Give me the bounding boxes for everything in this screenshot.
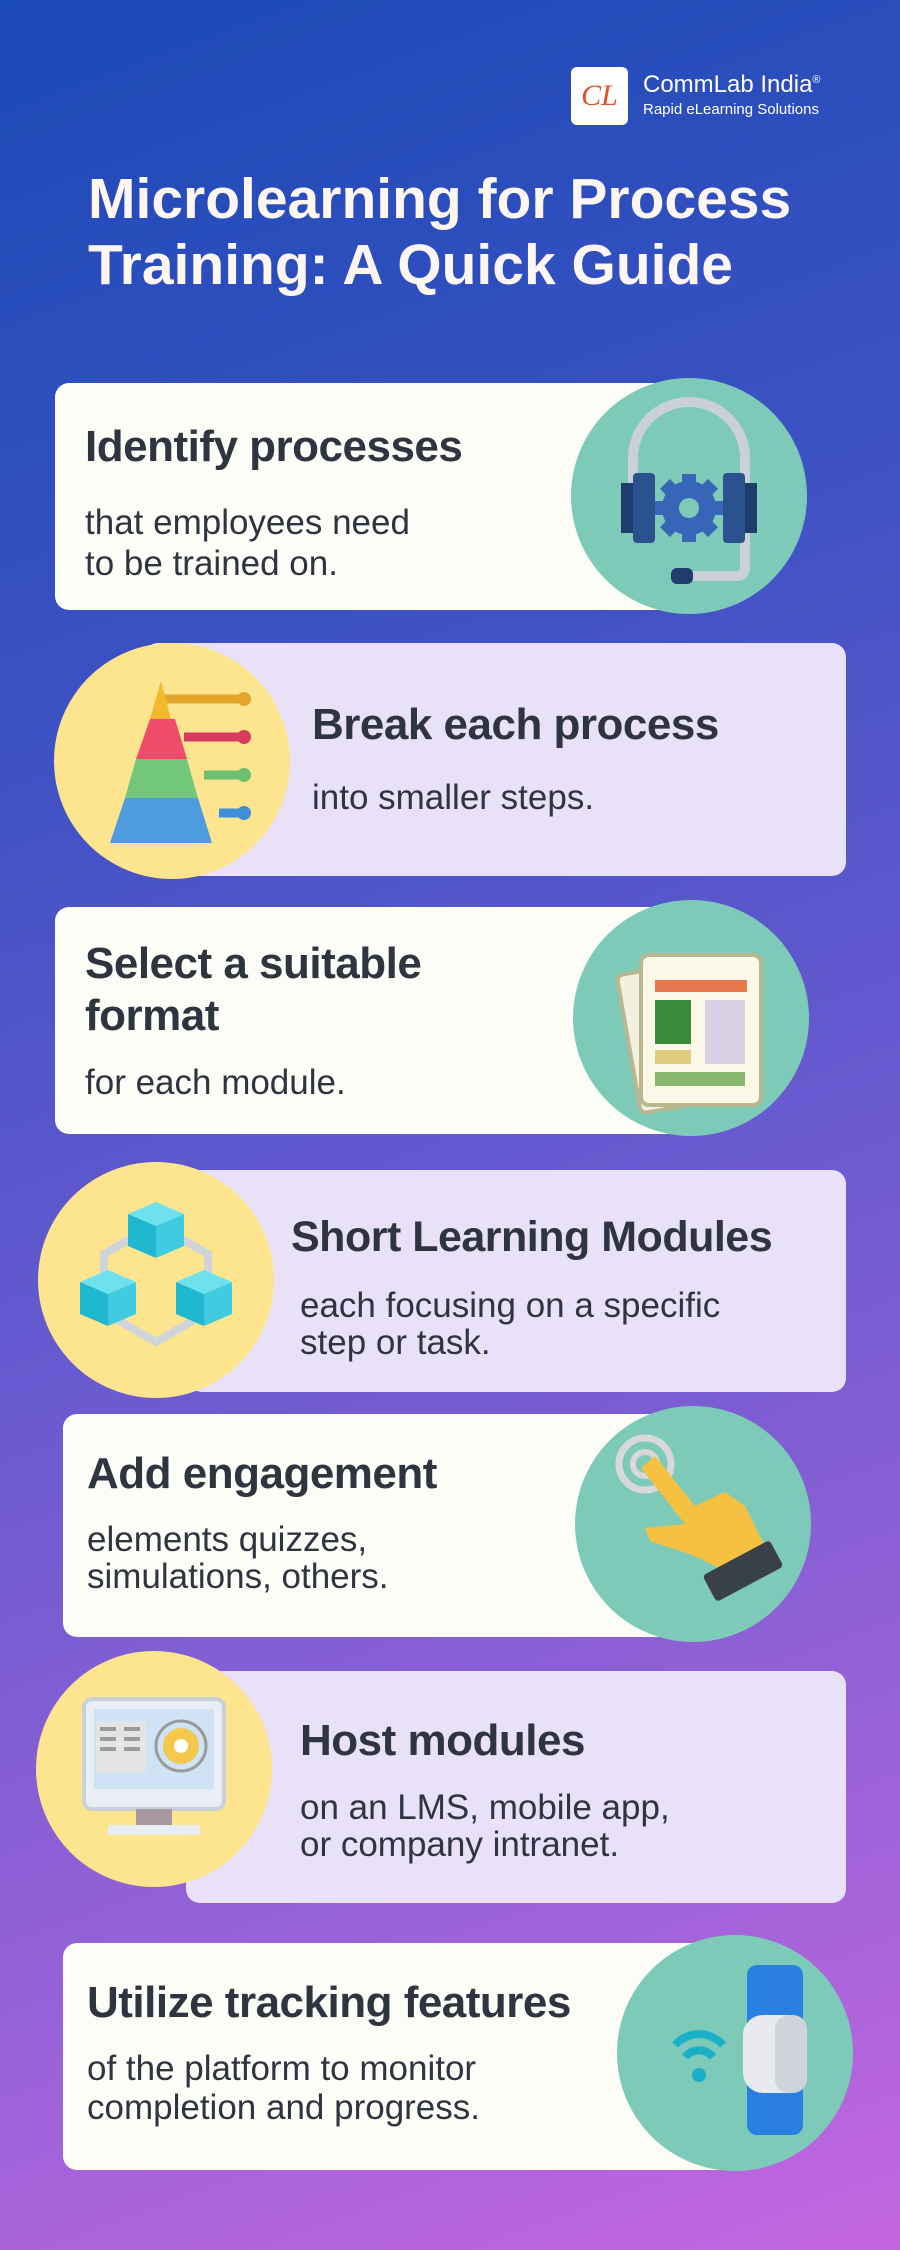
heading [85, 939, 421, 1040]
logo text: CommLab India® [643, 71, 821, 98]
heading: Host modules [300, 1716, 585, 1765]
panel: step 3 [55, 900, 809, 1136]
panel: step 4 [38, 1162, 846, 1398]
title [88, 167, 791, 297]
text: for each module. [85, 1063, 346, 1102]
text: or company intranet. [300, 1825, 619, 1864]
panel: step 2 [54, 643, 846, 879]
text: of the platform to monitor [87, 2049, 476, 2088]
text: completion and progress. [87, 2088, 480, 2127]
panel: step 7 [63, 1935, 853, 2171]
heading: Utilize tracking features [87, 1978, 571, 2027]
icon: pointing hand [575, 1406, 811, 1642]
icon: CL logo box [571, 67, 628, 125]
text [300, 1788, 670, 1864]
heading: Break each process [312, 700, 719, 749]
text [87, 2049, 480, 2127]
icon: CL logo box: CL [581, 79, 618, 112]
icon: fitness tracker [617, 1935, 853, 2171]
text [87, 1520, 389, 1596]
icon: headset gear [571, 378, 807, 614]
text [85, 503, 410, 583]
icon: monitor [36, 1651, 272, 1887]
text: simulations, others. [87, 1557, 389, 1596]
icon: document format [573, 900, 809, 1136]
text: to be trained on. [85, 544, 338, 583]
heading: format [85, 991, 219, 1040]
panel: step 1 [55, 378, 807, 614]
title: Microlearning for Process [88, 167, 791, 231]
text: step or task. [300, 1323, 491, 1362]
logo [571, 67, 821, 125]
text [300, 1286, 720, 1362]
text: elements quizzes, [87, 1520, 367, 1559]
title: Training: A Quick Guide [88, 233, 733, 297]
heading: Short Learning Modules [291, 1213, 772, 1261]
panel: step 6 [36, 1651, 846, 1903]
panel: step 5 [63, 1406, 811, 1642]
text: each focusing on a specific [300, 1286, 720, 1325]
text: into smaller steps. [312, 778, 594, 817]
heading: Identify processes [85, 422, 462, 471]
heading: Select a suitable [85, 939, 421, 988]
icon: pyramid [54, 643, 290, 879]
tagline: Rapid eLearning Solutions [643, 101, 819, 118]
heading: Add engagement [87, 1449, 437, 1498]
text: that employees need [85, 503, 410, 542]
text: on an LMS, mobile app, [300, 1788, 670, 1827]
icon: cubes [38, 1162, 274, 1398]
